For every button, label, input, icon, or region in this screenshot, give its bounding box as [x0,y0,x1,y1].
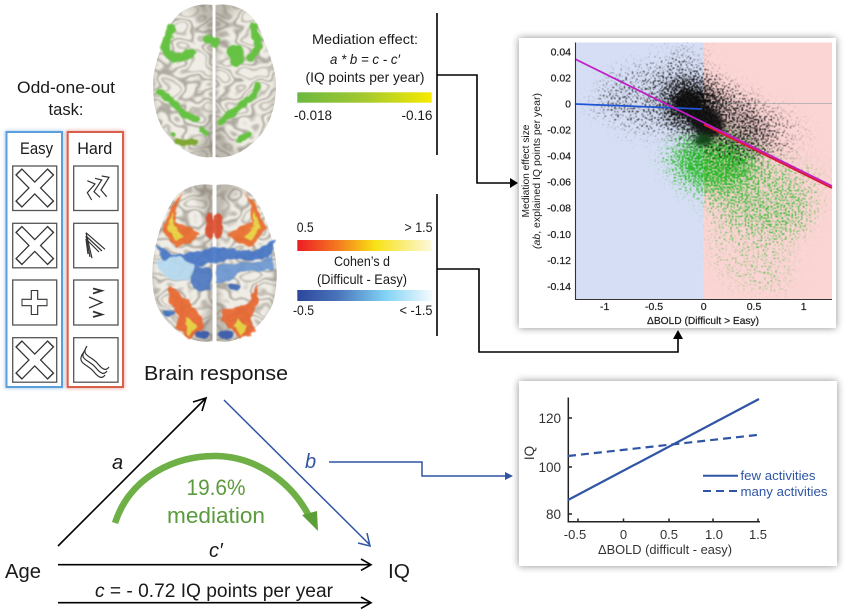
legend: Cohen's d: (Difficult - Easy) [317,271,407,287]
y axis ticks and labels: -0.06 [547,176,571,188]
icon: easy plus odd one out [13,280,57,325]
delta BOLD axis labels [564,527,767,557]
connector: Cohen's d legend to scatter plot [437,194,683,352]
x axis labels [600,301,807,327]
brain: Cohen's d activation map [150,183,280,344]
plot legend: many activities [740,484,828,499]
legend: mediation effect: a * b = c - c′ [330,51,401,67]
y axis ticks and labels: 0.02 [551,72,571,84]
panel: hard task column [68,132,123,387]
heading: odd-one-out task [17,78,115,119]
delta BOLD axis labels: 0.5 [660,527,678,542]
brain: mediation effect map [150,2,280,162]
connector: b to IQ plot [329,462,513,480]
scatter: black points cloud [584,46,812,178]
arrow: path a from age to brain response [58,398,206,546]
plot legend [703,468,828,499]
connector: mediation legend to scatter plot [437,13,518,188]
y axis title [520,93,543,249]
legend: Cohen's d: > 1.5 [404,219,433,235]
arrow: direct path c prime [58,559,371,570]
panel: scatter plot of mediation effect against delta BOLD [519,38,836,328]
legend: Cohen's d [293,219,433,318]
delta BOLD axis labels: ΔBOLD (difficult - easy) [598,542,732,557]
icon: hard chevrons [74,223,118,268]
heading: odd-one-out task: Odd-one-out [17,78,115,97]
y axis ticks and labels: -0.04 [547,150,571,162]
y axis ticks and labels [547,46,571,293]
panel: easy task column: Easy [20,140,54,158]
x axis labels: 0 [701,301,707,313]
icon: hard arrowheads odd one out [74,280,118,325]
y axis ticks and labels: -0.12 [547,255,571,267]
label: IQ: IQ [388,560,410,583]
y axis ticks and labels: -0.14 [547,281,571,293]
y axis title: (ab, explained IQ points per year) [531,93,543,249]
label: 19.6% mediation: mediation [167,503,265,528]
panel: easy task column [6,132,62,387]
y axis ticks and labels: 0 [565,98,571,110]
delta BOLD axis labels: 1.5 [749,527,767,542]
icon: hard zigzags [74,166,118,210]
icon: easy cross 4 [13,338,57,382]
y axis ticks and labels: -0.02 [547,124,571,136]
panel: IQ by delta BOLD interaction plot [519,381,837,566]
label: 19.6% mediation [167,475,265,528]
label: age: Age [5,560,41,583]
y axis ticks and labels: 0.04 [551,46,571,58]
icon: easy cross 1 [13,166,57,210]
icon: hard waves [74,338,118,382]
few activities line [568,399,759,500]
IQ axis labels: 100 [538,460,561,475]
scatter axes [576,42,832,300]
y axis ticks and labels: -0.10 [547,229,571,241]
x axis labels: 0.5 [747,301,761,313]
IQ axis labels [522,411,561,522]
legend: mediation effect: (IQ points per year) [306,69,424,85]
x axis labels: -1 [600,301,610,313]
scatter: significant green points [656,127,833,302]
arrow: green mediation arc [115,456,318,531]
IQ axis labels: 120 [538,411,561,426]
scatter: dense black core [674,91,730,146]
IQ axis labels: 80 [546,507,561,522]
label: b: b [305,451,316,473]
legend: Cohen's d: 0.5 [297,219,314,235]
legend: mediation effect: -0.16 [402,107,433,123]
x axis labels: -0.5 [645,301,663,313]
y axis ticks and labels: -0.08 [547,202,571,214]
x axis labels: 1 [801,301,807,313]
legend: Cohen's d: -0.5 [293,302,314,318]
arrow: total path c [58,597,371,608]
x axis labels: ΔBOLD (Difficult > Easy) [647,315,759,327]
delta BOLD axis labels: -0.5 [564,527,586,542]
many activities line [568,435,757,456]
plot legend: few activities [740,468,816,483]
label: a: a [112,452,123,474]
delta BOLD axis labels: 1.0 [705,527,723,542]
panel: hard task column: Hard [77,140,112,158]
icon: easy cross 2 [13,223,57,268]
label: brain response: Brain response [144,362,288,385]
legend: mediation effect: -0.018 [294,107,332,123]
legend: mediation effect [294,31,433,123]
delta BOLD axis labels: 0 [620,527,627,542]
plot axes [568,398,760,522]
legend: Cohen's d: < -1.5 [400,302,433,318]
y axis title: Mediation effect size [520,124,532,218]
trend lines [575,59,832,188]
label: 19.6% mediation: 19.6% [186,475,246,500]
arrow: path b from brain response to IQ [224,400,370,546]
label: c value: c = - 0.72 IQ points per year [95,581,334,602]
heading: odd-one-out task: task: [48,100,84,119]
legend: mediation effect: Mediation effect: [312,31,418,47]
IQ axis labels: IQ [522,446,537,460]
legend: Cohen's d: Cohen’s d [334,253,390,269]
label: c prime: c′ [209,540,224,562]
